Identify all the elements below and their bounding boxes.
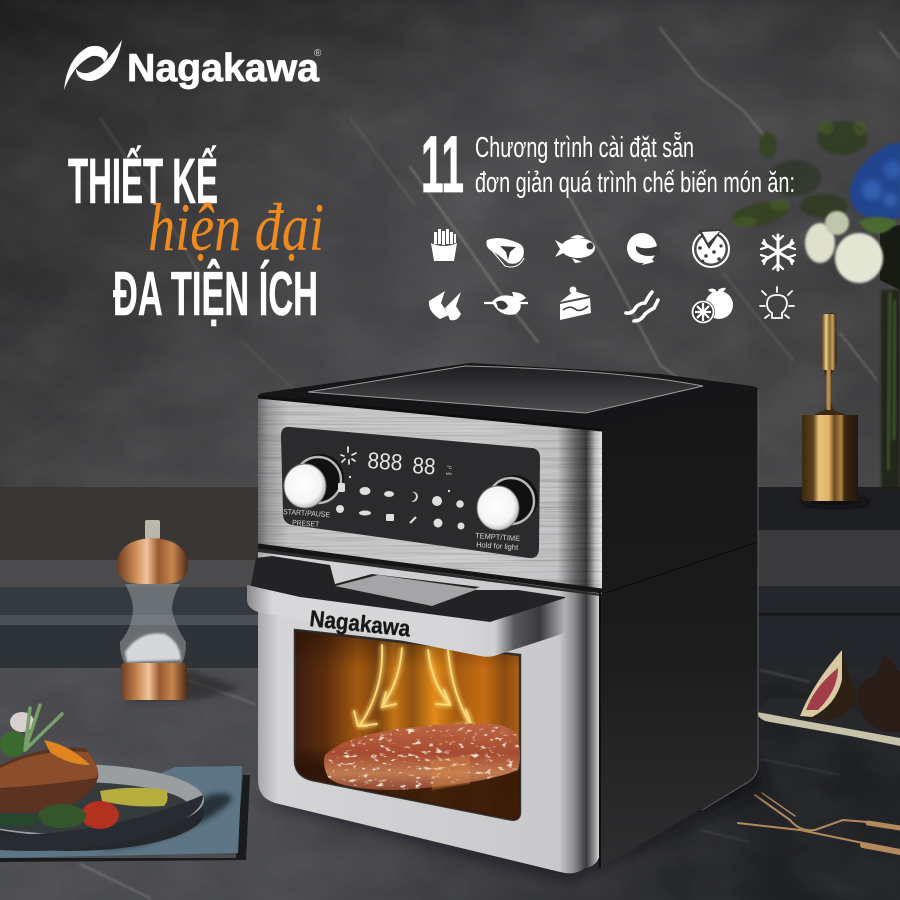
right side panel	[600, 388, 758, 868]
logo wordmark: Nagakawa	[127, 47, 319, 90]
foliage	[730, 120, 867, 231]
icon: fish	[555, 235, 595, 263]
counter top	[0, 668, 900, 900]
fork and knife	[738, 793, 900, 852]
headline line 3: ĐA TIỆN ÍCH	[113, 260, 318, 329]
carrot slice	[44, 740, 90, 765]
icon: T-bone steak	[486, 238, 524, 267]
icon: cake slice	[560, 286, 591, 320]
digital display: °C	[447, 465, 453, 470]
icon: shrimp	[627, 233, 660, 265]
icon: french fries	[431, 229, 457, 261]
brand on handle: Nagakawa	[308, 605, 412, 642]
icon: roast chicken on spit	[484, 292, 528, 315]
knob labels: START/PAUSE	[283, 507, 330, 519]
plate with steak and vegetables	[0, 705, 204, 851]
knob labels	[283, 507, 520, 552]
knob labels: PRESET	[292, 518, 320, 529]
rosemary and parsley garnish	[0, 705, 62, 757]
glass vase	[881, 290, 900, 490]
whole fig	[858, 655, 900, 732]
headline line 1: THIẾT KẾ	[68, 145, 218, 217]
icon: orange and citrus slice	[691, 288, 733, 324]
dark foliage behind bouquet	[880, 225, 900, 290]
steak	[0, 748, 98, 813]
handle	[247, 556, 565, 657]
oven window	[295, 625, 521, 825]
logo: Nagakawa	[64, 40, 322, 90]
stainless band	[247, 585, 565, 657]
icon: bacon	[626, 292, 658, 321]
digital display: 88	[412, 452, 436, 480]
knob labels: TEMPT/TIME	[475, 531, 520, 543]
tomato	[81, 801, 119, 829]
greens	[38, 804, 86, 828]
fan indicator	[341, 447, 356, 464]
knob labels: Hold for light	[476, 540, 519, 552]
green leaf	[858, 217, 897, 234]
feature title: 11 preset programmes	[421, 120, 795, 210]
stainless upper front	[258, 395, 602, 595]
headline script: hiện đại	[148, 189, 324, 265]
icon: pizza	[693, 229, 729, 267]
description: Chương trình cài đặt sẵn	[475, 131, 694, 164]
back counter bands	[0, 487, 258, 560]
digital display: 888	[367, 447, 403, 475]
air fryer	[247, 363, 770, 880]
floor shadow	[265, 760, 770, 880]
blue table mat	[0, 766, 250, 862]
panel mini icons	[336, 476, 464, 530]
handle tray	[247, 556, 565, 640]
cut fig	[800, 647, 856, 720]
control panel	[281, 427, 540, 558]
plant with blue and white flowers	[730, 120, 900, 490]
left knob	[284, 454, 344, 508]
digital display	[367, 447, 453, 480]
steak in oven	[324, 723, 520, 790]
pepper grinder	[117, 520, 240, 702]
icon: light bulb	[760, 287, 794, 318]
headline	[68, 145, 324, 329]
digital display: Min	[446, 472, 452, 476]
preset programme icons	[429, 229, 795, 324]
top surface	[258, 363, 757, 431]
gold candle holder	[801, 313, 869, 507]
icon: chicken wings	[429, 291, 461, 320]
right knob	[477, 475, 538, 530]
hot air arrows	[354, 645, 472, 727]
baby corn	[100, 788, 168, 806]
lower door body	[258, 552, 600, 873]
marble veins	[100, 28, 900, 395]
figs on plate	[757, 647, 900, 746]
logo mark swoosh	[64, 40, 122, 90]
logo: Nagakawa: ®	[314, 48, 322, 59]
blue hydrangea	[850, 143, 900, 219]
icon: snowflake	[761, 235, 795, 270]
seam between panels	[258, 546, 602, 591]
number 11: 11	[421, 120, 464, 210]
